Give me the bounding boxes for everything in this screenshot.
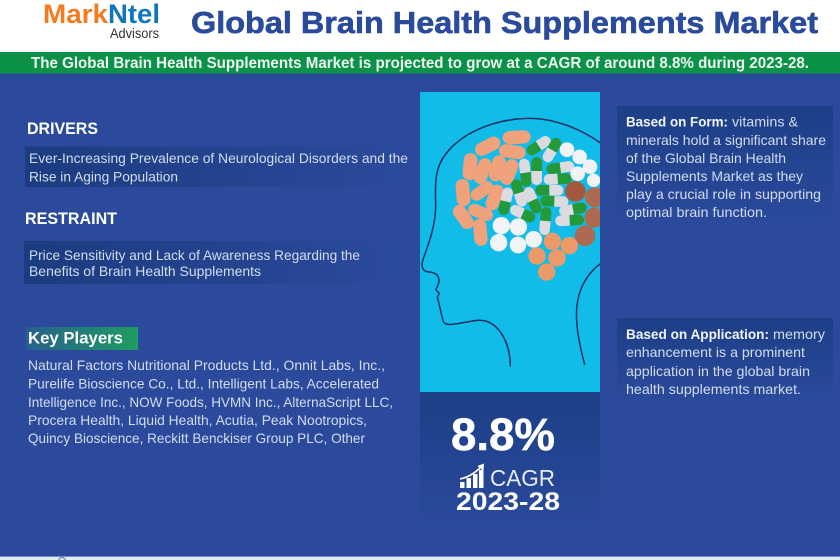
logo: Advisors	[110, 26, 159, 41]
orange tablets	[450, 130, 531, 246]
panel: restraint	[24, 241, 399, 284]
panel: based on form	[617, 106, 833, 226]
drivers heading: DRIVERS	[27, 120, 98, 138]
icon: growth chart	[460, 464, 484, 488]
head outline	[422, 118, 600, 366]
panel: based on application	[617, 318, 833, 403]
white tablets	[490, 142, 600, 253]
CAGR period: 2023-28	[456, 488, 560, 516]
CAGR label: CAGR	[490, 465, 555, 491]
subtitle banner: The Global Brain Health Supplements Market is projected to grow at a CAGR of around 8.8% during 2023-28.	[31, 55, 809, 72]
panel: based on form: play a crucial role in supporting	[626, 186, 821, 202]
key players list: Procera Health, Liquid Health, Acutia, Peak Nootropics,	[28, 412, 367, 428]
panel: drivers: Ever-Increasing Prevalence of Neurological Disorders and the	[29, 150, 408, 166]
key players list: Natural Factors Nutritional Products Ltd., Onnit Labs, Inc.,	[28, 357, 385, 373]
restraint heading: RESTRAINT	[25, 210, 117, 228]
panel: based on form: Supplements Market as they	[626, 168, 803, 184]
panel: based on application: memory	[773, 326, 825, 342]
header band	[0, 0, 840, 52]
panel: based on form: vitamins &	[732, 114, 799, 130]
panel: based on application: Based on Application:	[626, 326, 769, 342]
CAGR value: 8.8%	[451, 409, 555, 460]
panel: based on form: minerals hold a significant share	[626, 132, 826, 148]
title: Global Brain Health Supplements Market	[191, 6, 818, 40]
key players heading: Key Players	[28, 328, 123, 348]
panel: based on form: optimal brain function.	[626, 204, 767, 220]
footer strip	[0, 556, 840, 560]
brown tablets	[565, 181, 600, 246]
illustration: head with pills brain	[420, 92, 605, 392]
panel: drivers	[25, 146, 410, 187]
panel: based on application: enhancement is a prominent	[626, 344, 805, 360]
round orange tablets	[528, 233, 578, 281]
panel: restraint: Price Sensitivity and Lack of Awareness Regarding the	[29, 247, 360, 263]
panel: restraint: Benefits of Brain Health Supplements	[29, 263, 261, 279]
key players list: Purelife Bioscience Co., Ltd., Intelligent Labs, Accelerated	[28, 376, 379, 392]
key players list	[28, 357, 393, 446]
panel: based on application: health supplements market.	[626, 381, 801, 397]
key players list: Quincy Bioscience, Reckitt Benckiser Group PLC, Other	[28, 430, 365, 446]
panel: based on form: of the Global Brain Health	[626, 150, 786, 166]
green and grey capsules	[497, 134, 588, 235]
key players list: Intelligence Inc., NOW Foods, HVMN Inc., AlternaScript LLC,	[28, 394, 393, 410]
panel: based on application: application in the global brain	[626, 363, 810, 379]
panel: drivers: Rise in Aging Population	[29, 168, 178, 184]
logo	[43, 0, 160, 41]
panel: CAGR	[420, 392, 600, 530]
panel: based on form: Based on Form:	[626, 114, 728, 130]
